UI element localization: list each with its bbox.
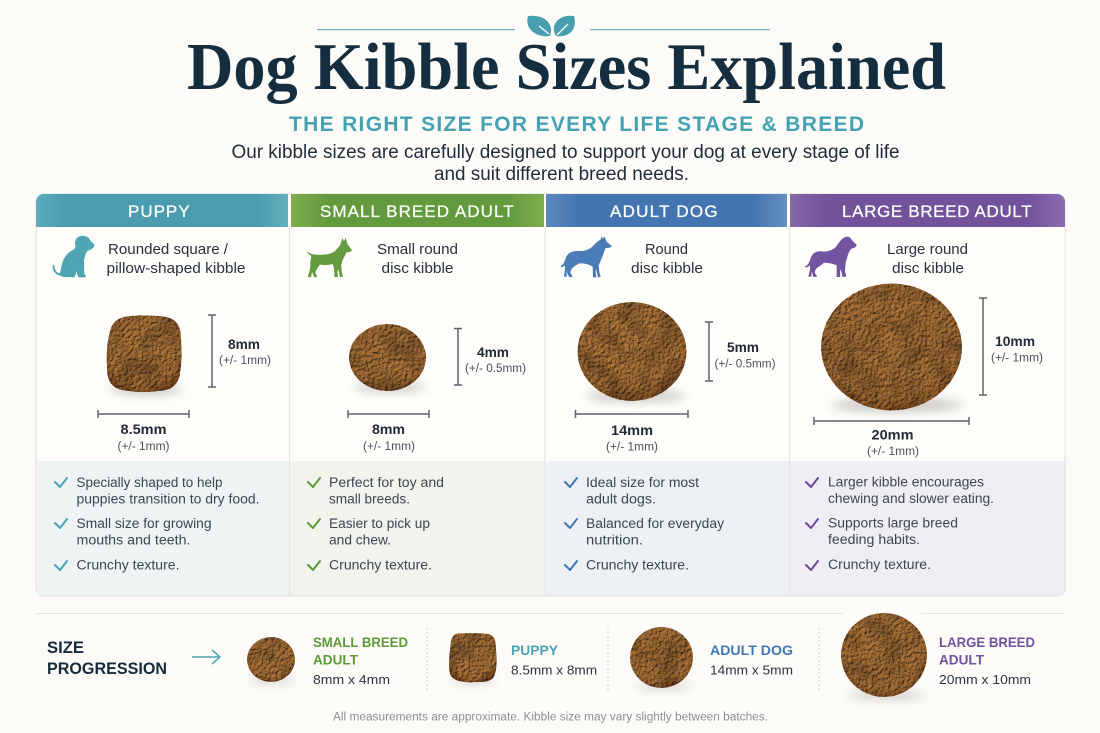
- adult dog shape description: Round: [645, 242, 688, 258]
- small breed height dimension: 4mm: [477, 344, 509, 360]
- large breed height dimension: 10mm: [995, 333, 1035, 349]
- puppy benefits list: mouths and teeth.: [76, 532, 190, 548]
- puppy kibble: [107, 315, 182, 395]
- item: small breed adult: ADULT: [313, 652, 358, 668]
- puppy shape description: pillow-shaped kibble: [106, 261, 246, 277]
- icon: small dog: [307, 238, 352, 277]
- large breed width dimension: [814, 417, 969, 458]
- large breed width dimension: (+/- 1mm): [867, 446, 919, 458]
- small breed shape description: Small round: [377, 242, 458, 258]
- small breed benefits background: [290, 461, 545, 596]
- subtitle: THE RIGHT SIZE FOR EVERY LIFE STAGE & BREED: [289, 113, 864, 136]
- adult dog height dimension: 5mm: [727, 339, 759, 355]
- puppy header: PUPPY: [128, 202, 190, 221]
- item: adult dog: 14mm x 5mm: [710, 662, 793, 678]
- small breed height dimension: (+/- 0.5mm): [465, 363, 526, 375]
- panel: puppy: [36, 194, 289, 596]
- item: adult dog: [630, 627, 793, 689]
- intro text: Our kibble sizes are carefully designed to support your dog at every stage of life: [232, 142, 900, 163]
- panel: large breed adult: [790, 194, 1065, 596]
- large breed benefits list: chewing and slower eating.: [828, 491, 994, 506]
- item: small breed adult: 8mm x 4mm: [313, 672, 390, 687]
- adult dog shape description: [631, 242, 703, 277]
- large breed shape description: Large round: [887, 242, 968, 258]
- puppy benefits list: [55, 475, 260, 572]
- adult dog header: [546, 194, 787, 227]
- adult dog benefits list: [565, 475, 724, 572]
- item: large breed adult: LARGE BREED: [939, 634, 1035, 650]
- item: large breed adult: ADULT: [939, 652, 984, 668]
- adult dog benefits background: [546, 461, 789, 596]
- small breed benefits list: and chew.: [329, 532, 391, 548]
- puppy header: [36, 194, 288, 227]
- puppy height dimension: [208, 315, 271, 387]
- footnote: All measurements are approximate. Kibble size may vary slightly between batches.: [333, 712, 768, 724]
- large breed benefits list: Crunchy texture.: [828, 557, 931, 572]
- puppy shape description: Rounded square /: [108, 242, 229, 258]
- intro text: and suit different breed needs.: [434, 164, 689, 185]
- large breed benefits list: Larger kibble encourages: [828, 474, 984, 490]
- large breed benefits background: [790, 461, 1064, 596]
- puppy benefits list: Specially shaped to help: [76, 475, 222, 490]
- puppy benefits list: Small size for growing: [76, 516, 212, 531]
- arrow: [192, 650, 220, 664]
- adult dog height dimension: (+/- 0.5mm): [714, 358, 776, 370]
- puppy width dimension: [98, 410, 189, 453]
- item: small breed adult: [247, 634, 408, 687]
- header ornament: lines and leaves: [317, 16, 770, 36]
- panel: small breed adult: [290, 194, 545, 596]
- puppy benefits background: [36, 461, 289, 596]
- puppy width dimension: 8.5mm: [120, 421, 166, 437]
- size progression strip: [36, 613, 1065, 699]
- adult dog width dimension: [576, 410, 688, 454]
- small breed benefits list: [308, 475, 444, 572]
- small breed benefits list: small breeds.: [329, 492, 410, 506]
- adult dog width dimension: (+/- 1mm): [606, 442, 658, 454]
- item: large breed adult: [841, 613, 1035, 699]
- size progression heading: PROGRESSION: [47, 659, 167, 678]
- adult dog benefits list: Crunchy texture.: [586, 558, 689, 572]
- small breed shape description: [377, 242, 458, 277]
- icon: large dog: [804, 237, 857, 277]
- comparison table card: [36, 194, 1065, 596]
- large breed kibble: [821, 284, 963, 412]
- small breed benefits list: Perfect for toy and: [329, 475, 444, 490]
- adult dog benefits list: Ideal size for most: [586, 475, 699, 490]
- small breed kibble: [349, 324, 426, 392]
- adult dog benefits list: Balanced for everyday: [586, 516, 724, 531]
- item: puppy: [449, 633, 597, 683]
- large breed shape description: [887, 242, 968, 277]
- size progression heading: SIZE: [47, 638, 84, 657]
- small breed width dimension: [348, 410, 429, 453]
- item: puppy: 8.5mm x 8mm: [511, 662, 597, 678]
- puppy width dimension: (+/- 1mm): [118, 441, 170, 453]
- small breed width dimension: 8mm: [372, 421, 405, 437]
- item: small breed adult: SMALL BREED: [313, 634, 408, 650]
- item: adult dog: ADULT DOG: [710, 642, 793, 658]
- panel: adult dog: [546, 194, 789, 596]
- large breed benefits list: feeding habits.: [828, 532, 920, 547]
- adult dog header: ADULT DOG: [610, 202, 718, 221]
- large breed benefits list: Supports large breed: [828, 516, 958, 530]
- large breed width dimension: 20mm: [872, 426, 914, 442]
- large breed header: [790, 194, 1065, 227]
- large breed benefits list: [806, 474, 994, 572]
- large breed height dimension: [979, 298, 1043, 395]
- adult dog benefits list: adult dogs.: [586, 492, 656, 506]
- small breed height dimension: [454, 328, 526, 385]
- puppy benefits list: puppies transition to dry food.: [76, 492, 260, 506]
- item: puppy: PUPPY: [511, 642, 559, 658]
- puppy height dimension: 8mm: [228, 336, 260, 352]
- large breed height dimension: (+/- 1mm): [991, 352, 1043, 364]
- small breed header: [291, 194, 544, 227]
- size progression heading: [47, 638, 167, 678]
- adult dog height dimension: [705, 322, 776, 381]
- puppy benefits list: Crunchy texture.: [76, 558, 180, 572]
- adult dog width dimension: 14mm: [611, 422, 653, 438]
- icon: adult dog: [560, 236, 612, 277]
- small breed width dimension: (+/- 1mm): [363, 441, 415, 453]
- title: Dog Kibble Sizes Explained: [187, 30, 946, 104]
- small breed benefits list: Crunchy texture.: [329, 558, 432, 572]
- item: large breed adult: 20mm x 10mm: [939, 672, 1031, 687]
- small breed shape description: disc kibble: [382, 261, 454, 277]
- small breed benefits list: Easier to pick up: [329, 516, 430, 531]
- adult dog kibble: [578, 302, 686, 402]
- large breed header: LARGE BREED ADULT: [842, 202, 1032, 221]
- puppy height dimension: (+/- 1mm): [219, 355, 271, 367]
- adult dog shape description: disc kibble: [631, 261, 703, 277]
- icon: puppy dog: [53, 236, 95, 277]
- adult dog benefits list: nutrition.: [586, 532, 643, 548]
- puppy shape description: [106, 242, 246, 277]
- large breed shape description: disc kibble: [892, 261, 964, 277]
- small breed header: SMALL BREED ADULT: [320, 202, 514, 221]
- intro text: [232, 142, 900, 185]
